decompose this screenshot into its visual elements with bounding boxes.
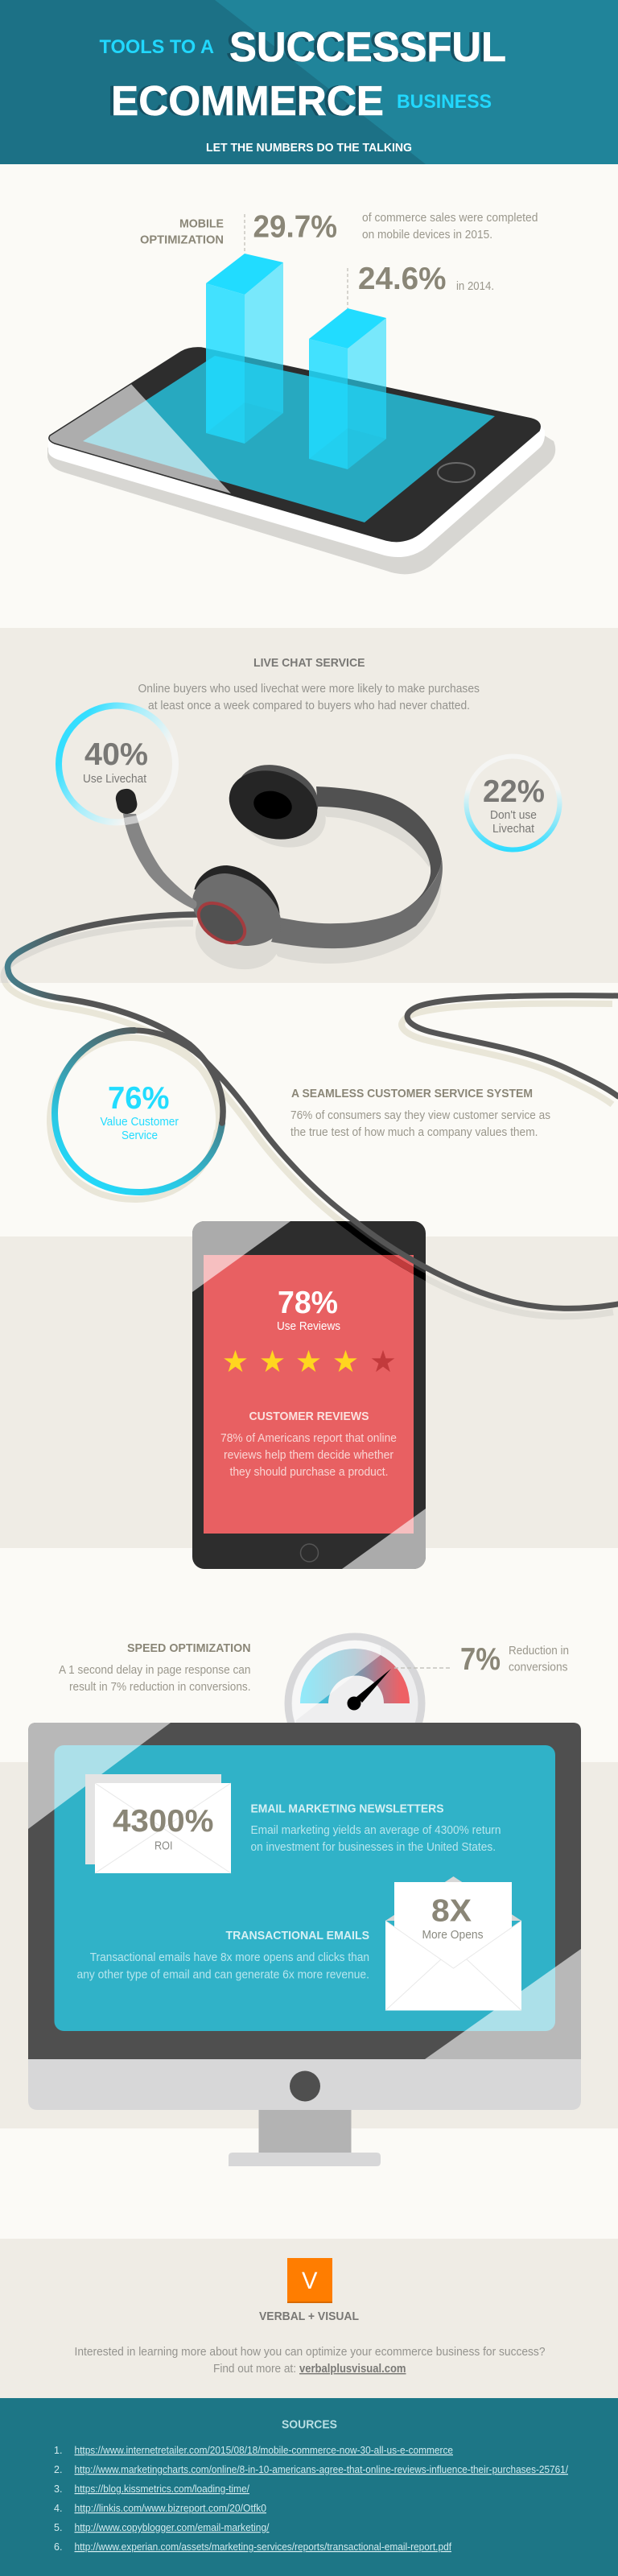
stat: 76%: Value Customer xyxy=(100,1116,179,1129)
panel: brand footer xyxy=(74,2258,546,2376)
source list: http://www.marketingcharts.com/online/8-in-10-americans-agree-that-online-reviews-influence-their-purchases-25761/ xyxy=(74,2464,568,2475)
text: 2014 stat: in 2014. xyxy=(456,280,494,293)
ring: 22% don't use livechat: Livechat xyxy=(492,823,534,836)
panel: speed optimization xyxy=(59,1633,568,1723)
headband xyxy=(316,786,442,912)
text block xyxy=(290,1109,550,1139)
stat: 78%: Use Reviews xyxy=(277,1320,340,1333)
text block: reviews help them decide whether xyxy=(224,1449,393,1462)
source list: https://blog.kissmetrics.com/loading-time/ xyxy=(74,2483,249,2495)
text: 2015 stat xyxy=(362,212,538,242)
heading: MOBILE xyxy=(179,217,224,230)
heading: OPTIMIZATION xyxy=(140,233,224,246)
title: SUCCESSFUL xyxy=(229,24,506,71)
cable shadow xyxy=(3,923,613,1316)
subtitle: LET THE NUMBERS DO THE TALKING xyxy=(206,141,412,155)
icon: open envelope: More Opens xyxy=(422,1929,483,1942)
text block: Online buyers who used livechat were more likely to make purchases xyxy=(138,683,480,696)
text block xyxy=(220,1432,397,1479)
bar: 2015 xyxy=(206,254,283,444)
header banner xyxy=(0,0,618,164)
ring: 40% use livechat: Use Livechat xyxy=(83,773,146,786)
stat: 76%: Service xyxy=(122,1129,158,1142)
ring: 22% don't use livechat xyxy=(467,757,560,850)
text block: verbalplusvisual.com xyxy=(299,2363,406,2376)
text block xyxy=(251,1824,501,1854)
text block: on investment for businesses in the United States. xyxy=(251,1841,496,1854)
microphone boom xyxy=(123,814,196,909)
icon: newsletter envelope xyxy=(85,1774,231,1873)
source list: 1. xyxy=(54,2445,62,2456)
source list: http://www.copyblogger.com/email-marketing/ xyxy=(74,2522,270,2533)
source list xyxy=(54,2445,568,2553)
headset shadow xyxy=(188,768,442,978)
stat: 7%: 7% xyxy=(460,1642,501,1677)
icon: verbal + visual logo: V xyxy=(302,2268,317,2294)
text block: Interested in learning more about how you can optimize your ecommerce business for success? xyxy=(74,2346,546,2359)
stat: 24.6%: 24.6% xyxy=(358,262,446,296)
text block xyxy=(77,1951,369,1982)
text: reduction in conversions: Reduction in xyxy=(509,1645,569,1657)
heading: SOURCES xyxy=(282,2418,337,2432)
icon: verbal + visual logo xyxy=(287,2258,332,2303)
heading: SPEED OPTIMIZATION xyxy=(127,1641,251,1655)
icon: speedometer gauge xyxy=(285,1633,425,1723)
text block: result in 7% reduction in conversions. xyxy=(69,1681,251,1694)
heading: LIVE CHAT SERVICE xyxy=(253,656,365,670)
source list: 4. xyxy=(54,2503,62,2514)
ring: 22% don't use livechat: 22% xyxy=(483,774,545,809)
panel: live chat service xyxy=(59,656,560,850)
panel: customer reviews content xyxy=(220,1286,397,1479)
text block xyxy=(74,2346,546,2376)
heading: A SEAMLESS CUSTOMER SERVICE SYSTEM xyxy=(291,1087,533,1100)
text block: they should purchase a product. xyxy=(230,1466,388,1479)
headset cable xyxy=(7,914,618,1308)
text block: the true test of how much a company values them. xyxy=(290,1126,538,1139)
text block: Find out more at: xyxy=(213,2363,296,2376)
text block xyxy=(59,1664,251,1694)
ring: 22% don't use livechat: Don't use xyxy=(490,809,537,822)
text: 2015 stat: of commerce sales were completed xyxy=(362,212,538,225)
stat: 78%: 78% xyxy=(278,1286,338,1320)
icon: smartphone xyxy=(40,348,555,574)
text block: A 1 second delay in page response can xyxy=(59,1664,251,1677)
icon: headset xyxy=(114,754,443,978)
panel: email marketing xyxy=(77,1774,521,2011)
microphone head xyxy=(114,787,139,815)
text block: Email marketing yields an average of 4300% return xyxy=(251,1824,501,1837)
icon: newsletter envelope: ROI xyxy=(154,1840,172,1853)
heading: TRANSACTIONAL EMAILS xyxy=(225,1929,369,1942)
heading: CUSTOMER REVIEWS xyxy=(249,1410,369,1423)
icon: tablet with customer reviews xyxy=(192,1221,426,1569)
icon: open envelope xyxy=(385,1876,521,2011)
source list: http://linkis.com/www.bizreport.com/20/Otfk0 xyxy=(74,2503,266,2514)
panel: mobile optimization xyxy=(40,209,555,574)
source list: 6. xyxy=(54,2541,62,2553)
bar: 2014 xyxy=(309,308,386,469)
bottom ear cup xyxy=(192,865,281,951)
text block: 76% of consumers say they view customer service as xyxy=(290,1109,550,1122)
ring: 40% use livechat: 40% xyxy=(84,737,148,772)
ring: 40% use livechat xyxy=(59,705,175,823)
text: reduction in conversions xyxy=(509,1645,569,1674)
stat: 76% xyxy=(100,1081,179,1142)
text: 2015 stat: on mobile devices in 2015. xyxy=(362,229,492,242)
source list: https://www.internetretailer.com/2015/08/18/mobile-commerce-now-30-all-us-e-commerce xyxy=(74,2445,453,2456)
source list: http://www.experian.com/assets/marketing-services/reports/transactional-email-report.pdf xyxy=(74,2541,451,2553)
text block xyxy=(138,683,480,712)
heading xyxy=(140,217,224,246)
top ear cup xyxy=(220,754,328,850)
brand name: VERBAL + VISUAL xyxy=(259,2310,359,2323)
title: BUSINESS xyxy=(397,91,492,113)
source list: 2. xyxy=(54,2464,62,2475)
heading: EMAIL MARKETING NEWSLETTERS xyxy=(251,1802,444,1816)
icon: open envelope: 8X xyxy=(431,1893,472,1929)
icon: star rating xyxy=(224,1350,394,1372)
text: reduction in conversions: conversions xyxy=(509,1662,568,1674)
text block: 78% of Americans report that online xyxy=(220,1432,397,1445)
title: TOOLS TO A xyxy=(100,36,214,58)
stat: 29.7%: 29.7% xyxy=(253,209,337,245)
text block: Transactional emails have 8x more opens and clicks than xyxy=(90,1951,369,1964)
icon: desktop monitor xyxy=(28,1723,581,2166)
title xyxy=(100,24,506,125)
source list: 3. xyxy=(54,2483,62,2495)
panel: seamless customer service xyxy=(100,1081,550,1142)
icon: newsletter envelope: 4300% xyxy=(113,1804,214,1839)
text block: any other type of email and can generate 6x more revenue. xyxy=(77,1969,369,1982)
source list: 5. xyxy=(54,2522,62,2533)
title: ECOMMERCE xyxy=(111,78,384,125)
stat: 76%: 76% xyxy=(108,1081,169,1116)
panel: sources xyxy=(0,2398,618,2576)
text block: at least once a week compared to buyers who had never chatted. xyxy=(148,700,470,712)
